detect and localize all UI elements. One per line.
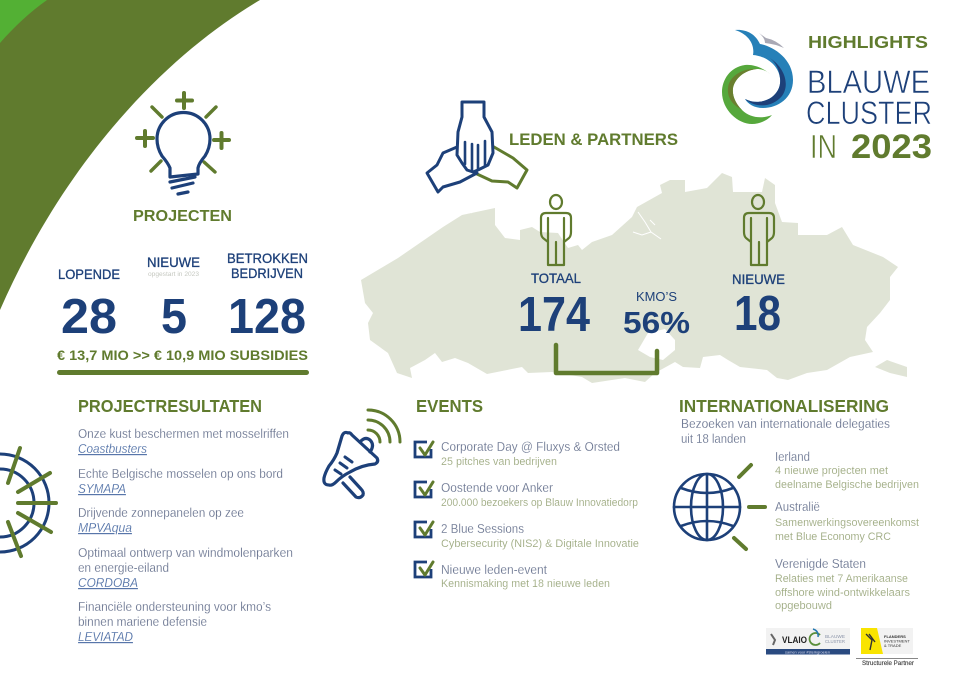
logo: flanders investment and trade <box>861 628 913 654</box>
label: structurele partner: Structurele Partner <box>862 660 915 667</box>
result: coastbusters: Coastbusters <box>78 442 147 456</box>
result: leviatad: LEVIATAD <box>78 630 133 644</box>
event: oostende voor anker: Oostende voor Anker <box>441 481 553 495</box>
stat: lopende: LOPENDE <box>58 267 120 282</box>
result: leviatad: Financiële ondersteuning voor kmo’s <box>78 600 271 614</box>
stat: kmo's: 56% <box>623 305 690 340</box>
country: verenigde staten <box>775 557 910 612</box>
underline bar <box>57 370 309 375</box>
panel: leden en partners <box>427 102 785 373</box>
logo: flanders investment and trade: & TRADE <box>884 643 902 648</box>
event: corporate day <box>415 440 620 468</box>
country: australie: Samenwerkingsovereenkomst <box>775 517 919 529</box>
heading: projectresultaten: PROJECTRESULTATEN <box>78 396 262 416</box>
result: cordoba: en energie-eiland <box>78 561 169 575</box>
icon: megaphone <box>324 410 400 498</box>
stat: nieuwe: opgestart in 2023 <box>148 272 200 278</box>
stat: nieuwe <box>147 255 200 344</box>
country: ierland: 4 nieuwe projecten met <box>775 465 888 477</box>
logo: flanders investment and trade: FLANDERS <box>884 634 906 639</box>
event: nieuwe leden <box>415 562 610 590</box>
stat: nieuwe: NIEUWE <box>147 255 200 270</box>
stat: betrokken bedrijven <box>227 251 308 344</box>
result: leviatad: binnen mariene defensie <box>78 615 207 629</box>
event: oostende voor anker <box>415 481 638 509</box>
logo: vlaio blauwe cluster <box>766 628 850 654</box>
result: coastbusters <box>78 427 289 456</box>
subsidies line: € 13,7 MIO >> € 10,9 MIO SUBSIDIES <box>57 348 308 363</box>
country: verenigde staten: Verenigde Staten <box>775 557 866 571</box>
logo: vlaio blauwe cluster: VLAIO <box>782 635 807 645</box>
result: coastbusters: Onze kust beschermen met mosselriffen <box>78 427 289 441</box>
map of Flanders <box>361 173 907 383</box>
country: ierland <box>775 450 919 491</box>
icon: target <box>0 448 56 556</box>
event: blue sessions <box>415 522 639 550</box>
country: verenigde staten: Relaties met 7 Amerikaanse <box>775 573 908 585</box>
event: nieuwe leden: Nieuwe leden-event <box>441 563 547 577</box>
stat: totaal: 174 <box>518 288 590 342</box>
logo mark <box>722 30 793 124</box>
result: mpvaqua <box>78 506 244 535</box>
stat: betrokken bedrijven: BETROKKEN <box>227 251 308 266</box>
heading: projecten: PROJECTEN <box>133 208 232 225</box>
logo and title <box>722 30 932 166</box>
result: leviatad <box>78 600 271 644</box>
panel: projecten <box>57 93 309 375</box>
stat: nieuwe: 5 <box>161 290 187 344</box>
stat: lopende: 28 <box>61 290 117 344</box>
logo: vlaio blauwe cluster: CLUSTER <box>825 639 846 644</box>
panel: internationalisering <box>674 396 919 612</box>
stat: kmo's: KMO’S <box>636 289 677 304</box>
panel: events <box>324 396 639 590</box>
heading: leden en partners: LEDEN & PARTNERS <box>509 131 678 149</box>
event: oostende voor anker: 200.000 bezoekers op Blauw Innovatiedorp <box>441 497 638 509</box>
event: corporate day: 25 pitches van bedrijven <box>441 456 557 468</box>
stat: nieuwe leden: NIEUWE <box>732 272 785 287</box>
country: verenigde staten: opgebouwd <box>775 600 832 612</box>
icon: light bulb <box>137 93 229 194</box>
country: ierland: Ierland <box>775 450 810 464</box>
stat: totaal: TOTAAL <box>531 271 581 286</box>
label: highlights: HIGHLIGHTS <box>808 32 928 52</box>
intro text <box>681 417 890 446</box>
result: symapa <box>78 467 283 496</box>
heading: internationalisering: INTERNATIONALISERING <box>679 396 889 416</box>
result: cordoba <box>78 546 293 590</box>
intro text: Bezoeken van internationale delegaties <box>681 417 890 431</box>
icon: globe <box>674 465 765 549</box>
country: australie <box>775 500 919 543</box>
stat: lopende <box>58 267 120 344</box>
green corner swoosh <box>0 0 260 310</box>
event: blue sessions: 2 Blue Sessions <box>441 522 524 536</box>
stat: kmo's <box>623 289 690 340</box>
result: symapa: Echte Belgische mosselen op ons bord <box>78 467 283 481</box>
stat: betrokken bedrijven: 128 <box>228 290 306 344</box>
event: nieuwe leden: Kennismaking met 18 nieuwe leden <box>441 578 610 590</box>
stat: totaal <box>518 271 590 342</box>
stat: betrokken bedrijven: BEDRIJVEN <box>231 266 303 281</box>
event: blue sessions: Cybersecurity (NIS2) & Digitale Innovatie <box>441 538 639 550</box>
panel: projectresultaten <box>0 396 293 644</box>
heading: in: IN <box>810 128 837 165</box>
country: ierland: deelname Belgische bedrijven <box>775 479 919 491</box>
result: cordoba: CORDOBA <box>78 576 138 590</box>
icon: person nieuwe <box>744 195 774 265</box>
heading: cluster: CLUSTER <box>806 95 932 131</box>
bracket <box>556 345 657 373</box>
heading: 2023: 2023 <box>851 128 932 166</box>
logo: vlaio blauwe cluster: BLAUWE <box>825 634 845 639</box>
country: australie: Australië <box>775 500 820 514</box>
result: cordoba: Optimaal ontwerp van windmolenparken <box>78 546 293 560</box>
icon: three hands <box>427 102 527 192</box>
label: structurele partner <box>856 658 918 667</box>
country: verenigde staten: offshore wind-ontwikkelaars <box>775 587 910 599</box>
stat: nieuwe leden: 18 <box>734 287 781 341</box>
heading: events: EVENTS <box>416 396 483 416</box>
intro text: uit 18 landen <box>681 432 746 446</box>
heading: blauwe: BLAUWE <box>807 64 930 100</box>
result: symapa: SYMAPA <box>78 482 126 496</box>
result: mpvaqua: Drijvende zonnepanelen op zee <box>78 506 244 520</box>
logo: flanders investment and trade: INVESTMENT <box>884 638 910 644</box>
event: corporate day: Corporate Day @ Fluxys & Orsted <box>441 440 620 454</box>
result: mpvaqua: MPVAqua <box>78 521 132 535</box>
icon: person totaal <box>541 195 571 265</box>
logo: vlaio blauwe cluster: samen voor #sterkgroeien <box>785 650 830 654</box>
partner logos <box>766 628 918 667</box>
country: australie: met Blue Economy CRC <box>775 531 891 543</box>
